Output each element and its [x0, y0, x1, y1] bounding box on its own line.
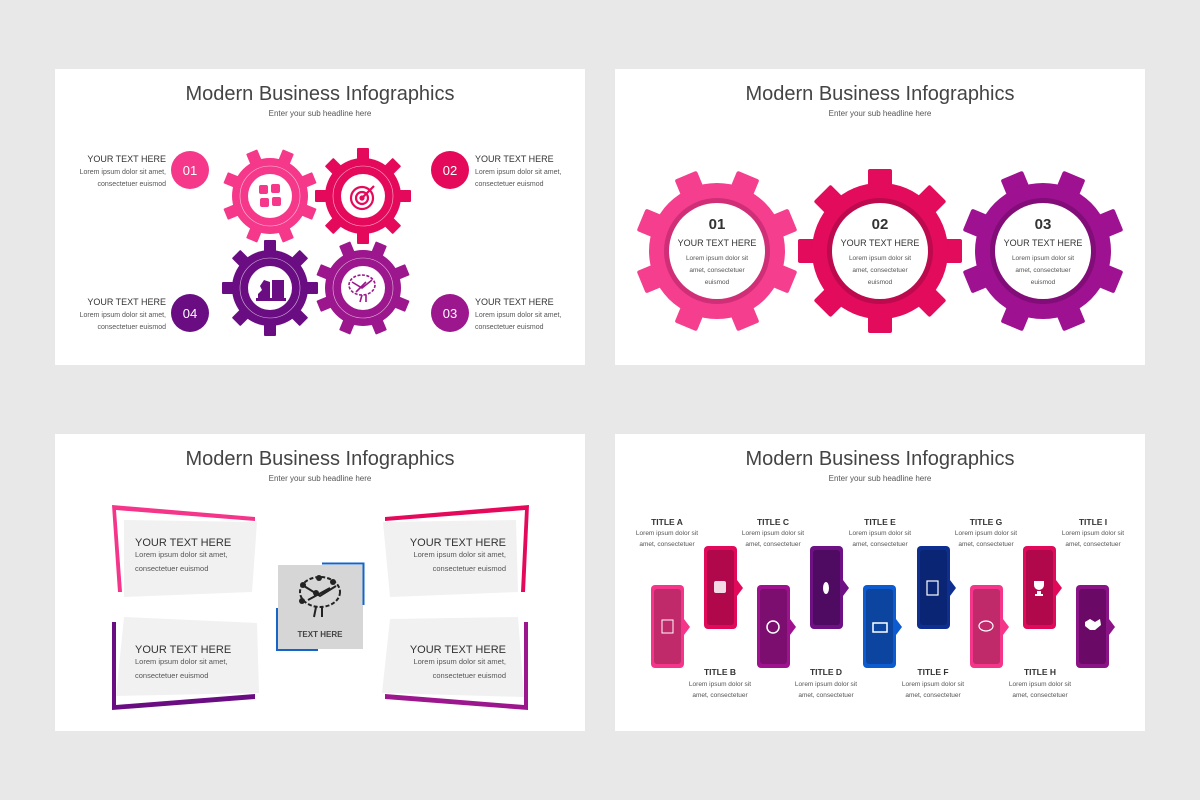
- box top-left: consectetuer euismod: [135, 564, 208, 573]
- step F: amet, consectetuer: [905, 692, 961, 699]
- step F: [902, 546, 964, 699]
- big gear 03: 03: [1035, 216, 1051, 233]
- big gear 02: [798, 169, 962, 333]
- step G: TITLE G: [970, 517, 1003, 527]
- big gear 03: Lorem ipsum dolor sit: [1012, 255, 1074, 262]
- item 04: 04: [183, 306, 197, 321]
- big gear 03: [936, 144, 1150, 358]
- box bottom-left: consectetuer euismod: [135, 671, 208, 680]
- box bottom-right: Lorem ipsum dolor sit amet,: [413, 657, 506, 666]
- step D: TITLE D: [810, 667, 842, 677]
- item 02: 02: [443, 163, 457, 178]
- step A: [636, 517, 698, 668]
- step B: amet, consectetuer: [692, 692, 748, 699]
- item 02: Lorem ipsum dolor sit amet,: [475, 169, 561, 176]
- step F: TITLE F: [917, 667, 949, 677]
- box top-left: YOUR TEXT HERE: [135, 537, 231, 549]
- item 04: consectetuer euismod: [98, 324, 166, 331]
- step E: amet, consectetuer: [852, 541, 908, 548]
- item 03: Lorem ipsum dolor sit amet,: [475, 312, 561, 319]
- item 01: consectetuer euismod: [98, 181, 166, 188]
- item 03: [431, 294, 561, 332]
- big gear 03: amet, consectetuer: [1015, 267, 1071, 274]
- step G: Lorem ipsum dolor sit: [955, 530, 1017, 537]
- gear 03: [300, 225, 426, 351]
- panel: three gears: [610, 69, 1150, 365]
- step H: TITLE H: [1024, 667, 1056, 677]
- gear 04: [222, 240, 318, 336]
- box top-right: YOUR TEXT HERE: [410, 537, 506, 549]
- subtitle 3: Enter your sub headline here: [269, 474, 372, 483]
- box top-left: [112, 505, 257, 597]
- box bottom-right: YOUR TEXT HERE: [410, 644, 506, 656]
- step B: Lorem ipsum dolor sit: [689, 681, 751, 688]
- box bottom-left: YOUR TEXT HERE: [135, 644, 231, 656]
- step A: TITLE A: [651, 517, 683, 527]
- title 4: Modern Business Infographics: [745, 448, 1015, 470]
- big gear 02: 02: [872, 216, 888, 233]
- item 01: Lorem ipsum dolor sit amet,: [80, 169, 166, 176]
- panel: gears four: [55, 69, 585, 365]
- step C: amet, consectetuer: [745, 541, 801, 548]
- step G: amet, consectetuer: [958, 541, 1014, 548]
- step D: amet, consectetuer: [798, 692, 854, 699]
- big gear 01: 01: [709, 216, 725, 233]
- item 02: YOUR TEXT HERE: [475, 154, 554, 164]
- box bottom-left: Lorem ipsum dolor sit amet,: [135, 657, 228, 666]
- step E: Lorem ipsum dolor sit: [849, 530, 911, 537]
- title 3: Modern Business Infographics: [185, 448, 455, 470]
- box top-right: [383, 505, 529, 597]
- subtitle 2: Enter your sub headline here: [829, 109, 932, 118]
- gear 01: [207, 133, 333, 259]
- step C: [742, 517, 804, 668]
- box bottom-right: [382, 617, 528, 710]
- step C: TITLE C: [757, 517, 789, 527]
- item 04: Lorem ipsum dolor sit amet,: [80, 312, 166, 319]
- step G: [955, 517, 1017, 668]
- icon: brain: [349, 275, 375, 302]
- step I: amet, consectetuer: [1065, 541, 1121, 548]
- step F: Lorem ipsum dolor sit: [902, 681, 964, 688]
- step B: TITLE B: [704, 667, 736, 677]
- step A: amet, consectetuer: [639, 541, 695, 548]
- big gear 01: [610, 144, 824, 358]
- step D: [795, 546, 857, 699]
- step I: Lorem ipsum dolor sit: [1062, 530, 1124, 537]
- item 01: YOUR TEXT HERE: [87, 154, 166, 164]
- box top-right: Lorem ipsum dolor sit amet,: [413, 550, 506, 559]
- subtitle 1: Enter your sub headline here: [269, 109, 372, 118]
- center box: [277, 564, 364, 650]
- item 03: YOUR TEXT HERE: [475, 297, 554, 307]
- title 1: Modern Business Infographics: [185, 83, 455, 105]
- big gear 01: Lorem ipsum dolor sit: [686, 255, 748, 262]
- item 02: consectetuer euismod: [475, 181, 544, 188]
- item 01: 01: [183, 163, 197, 178]
- gear 02: [315, 148, 411, 244]
- step E: TITLE E: [864, 517, 896, 527]
- step I: [1062, 517, 1124, 668]
- box top-left: Lorem ipsum dolor sit amet,: [135, 550, 228, 559]
- step H: amet, consectetuer: [1012, 692, 1068, 699]
- panel: quad boxes: [55, 434, 585, 731]
- big gear 03: euismod: [1031, 279, 1056, 286]
- subtitle 4: Enter your sub headline here: [829, 474, 932, 483]
- box bottom-left: [112, 617, 259, 710]
- step I: TITLE I: [1079, 517, 1107, 527]
- box top-right: consectetuer euismod: [433, 564, 506, 573]
- icon: hands: [259, 184, 281, 207]
- panel: timeline: [615, 434, 1145, 731]
- item 03: consectetuer euismod: [475, 324, 544, 331]
- step E: [849, 517, 911, 668]
- icon: target: [351, 186, 374, 209]
- step H: [1009, 546, 1071, 699]
- item 04: YOUR TEXT HERE: [87, 297, 166, 307]
- big gear 02: euismod: [868, 279, 893, 286]
- step D: Lorem ipsum dolor sit: [795, 681, 857, 688]
- step H: Lorem ipsum dolor sit: [1009, 681, 1071, 688]
- step B: [689, 546, 751, 699]
- item 01: [80, 151, 209, 189]
- big gear 01: amet, consectetuer: [689, 267, 745, 274]
- title 2: Modern Business Infographics: [745, 83, 1015, 105]
- icon: chess: [256, 280, 286, 301]
- big gear 02: amet, consectetuer: [852, 267, 908, 274]
- big gear 02: Lorem ipsum dolor sit: [849, 255, 911, 262]
- item 02: [431, 151, 561, 189]
- big gear 01: YOUR TEXT HERE: [678, 238, 756, 248]
- center box: TEXT HERE: [298, 630, 343, 639]
- icon: brain center: [300, 577, 340, 617]
- item 03: 03: [443, 306, 457, 321]
- big gear 03: YOUR TEXT HERE: [1004, 238, 1082, 248]
- step C: Lorem ipsum dolor sit: [742, 530, 804, 537]
- big gear 01: euismod: [705, 279, 730, 286]
- box bottom-right: consectetuer euismod: [433, 671, 506, 680]
- item 04: [80, 294, 209, 332]
- step A: Lorem ipsum dolor sit: [636, 530, 698, 537]
- big gear 02: YOUR TEXT HERE: [841, 238, 919, 248]
